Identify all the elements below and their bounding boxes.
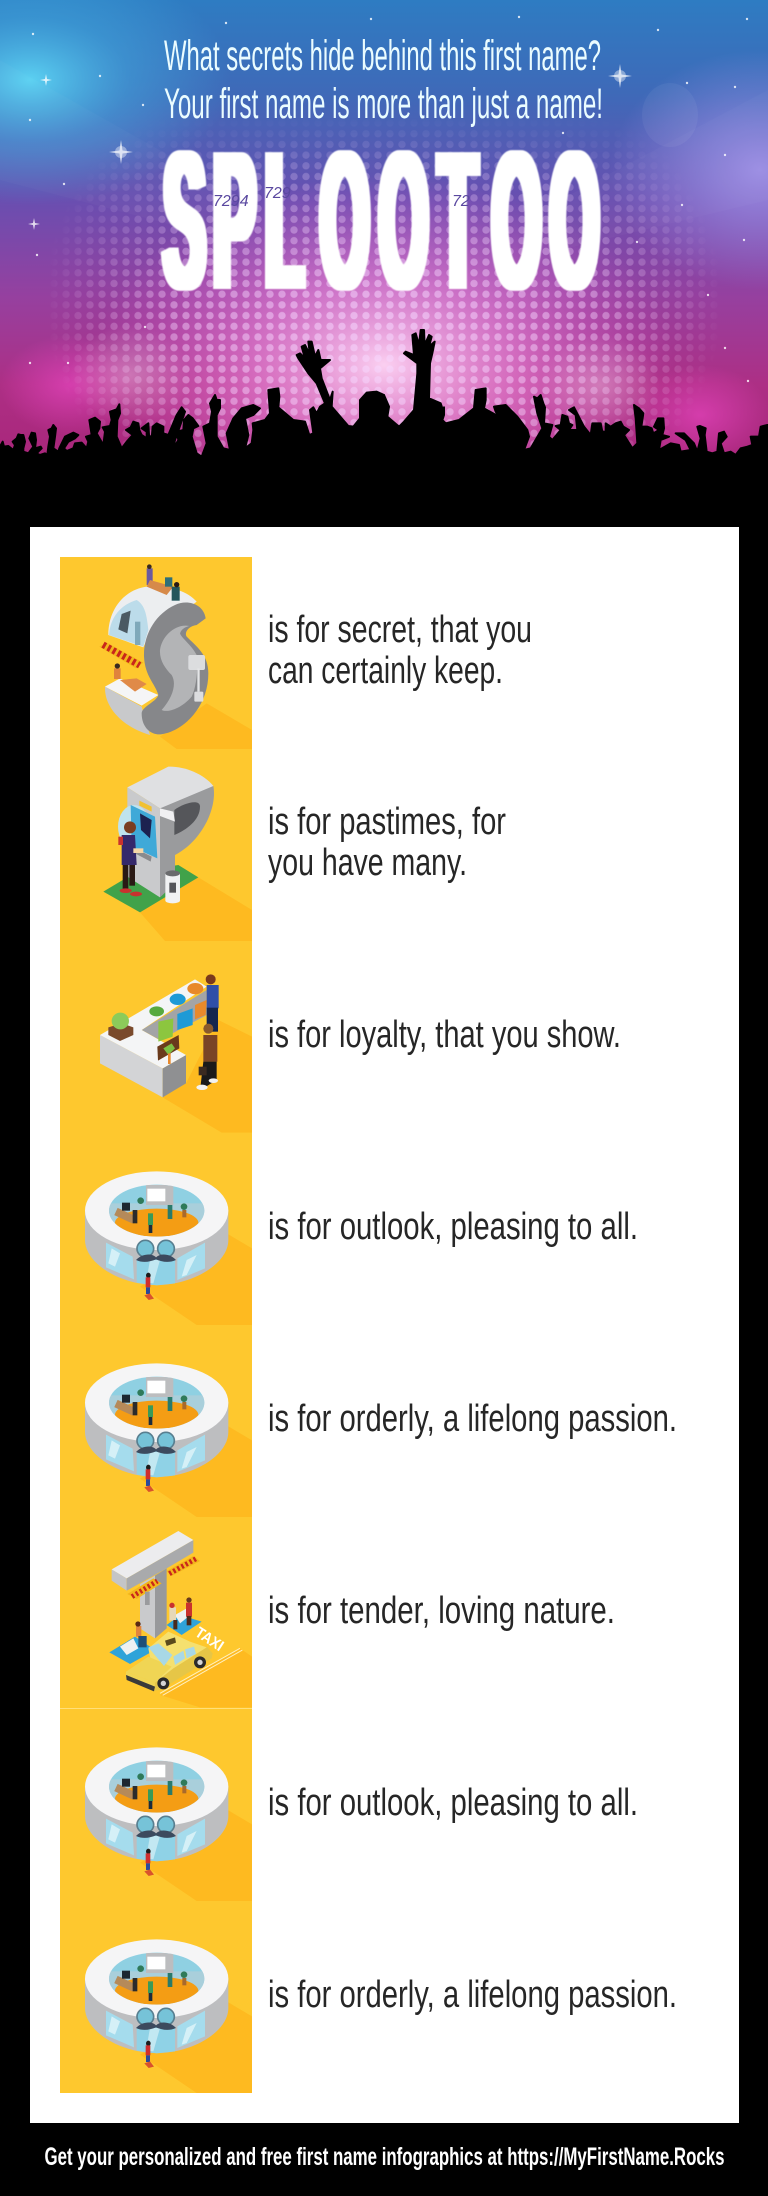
- text block: S: can certainly keep.: [268, 650, 503, 692]
- title: SPLOOTOO: 729: [264, 185, 291, 202]
- taxi car: [126, 1632, 213, 1691]
- crowd silhouette: [0, 330, 768, 530]
- subtitle: [164, 32, 603, 128]
- text block: S: [268, 609, 532, 692]
- text block: O outlook: is for outlook, pleasing to all.: [268, 1206, 638, 1248]
- text block: O outlook repeat: is for outlook, pleasing to all.: [268, 1782, 638, 1824]
- icon: letter O glasses shop ring (row 5): [85, 1363, 252, 1517]
- title: SPLOOTOO: 7294: [213, 193, 249, 210]
- header: stage background: [0, 0, 768, 455]
- text block: L: is for loyalty, that you show.: [268, 1014, 621, 1056]
- icon: letter O glasses shop ring (row 4): [85, 1171, 252, 1325]
- icon: letter L recycling counter: [100, 974, 252, 1133]
- sparkles: [28, 16, 749, 421]
- text block: S: is for secret, that you: [268, 609, 532, 651]
- text block: P: [268, 801, 506, 884]
- icon: letter T taxi stand: TAXI: [192, 1624, 226, 1655]
- icon: letter O glasses shop ring (row 8): [85, 1939, 252, 2093]
- icon: letter S building: [99, 564, 252, 749]
- text block: P: is for pastimes, for: [268, 801, 506, 843]
- icon: letter O glasses shop ring (row 7): [85, 1747, 252, 1901]
- text block: P: you have many.: [268, 842, 467, 884]
- title: SPLOOTOO: SPLOOTOO: [164, 110, 599, 330]
- title: SPLOOTOO: 72: [452, 193, 470, 210]
- icon: letter P cash machine: [103, 767, 252, 941]
- text block: T: is for tender, loving nature.: [268, 1590, 615, 1632]
- panel: white content card: [30, 527, 739, 2123]
- yellow illustration column: [60, 557, 252, 2093]
- icon: letter T taxi stand: [109, 1531, 252, 1707]
